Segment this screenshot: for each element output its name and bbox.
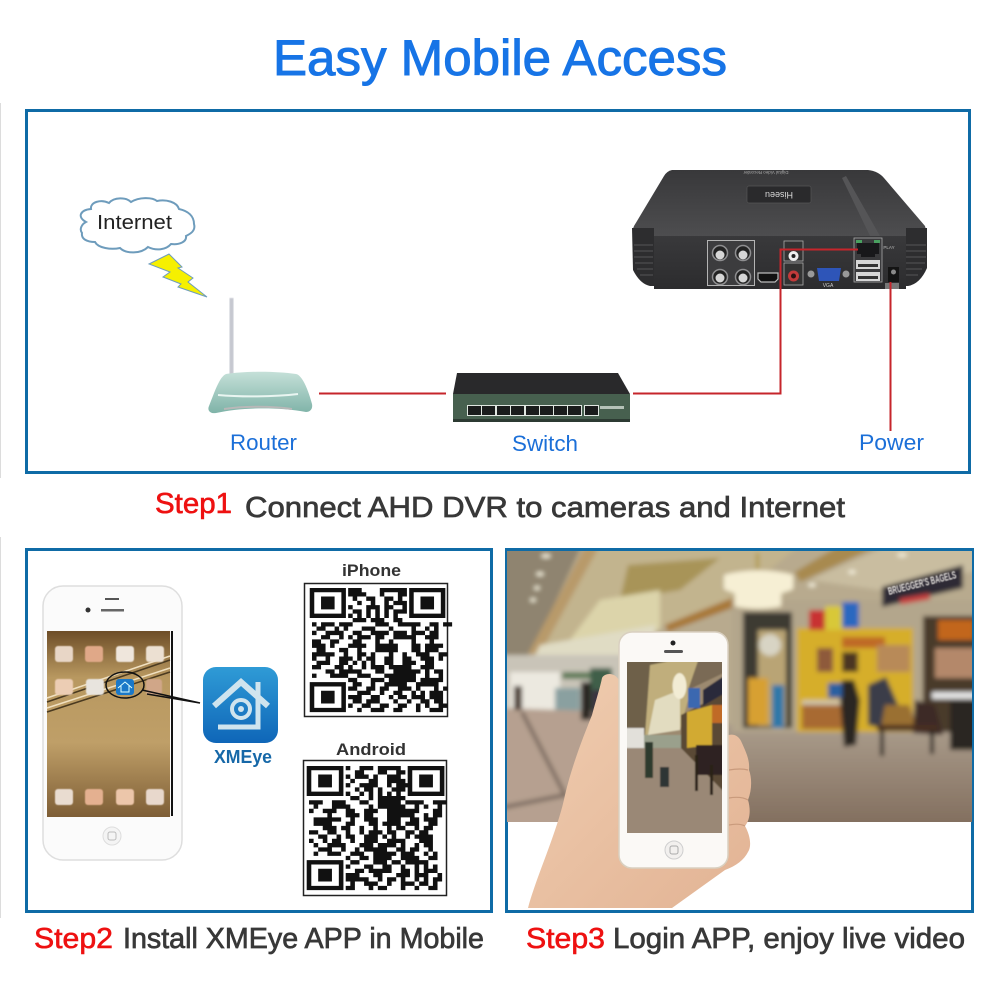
floor <box>728 725 972 822</box>
people <box>514 677 980 756</box>
mall photo background <box>500 545 983 830</box>
hand <box>528 674 751 908</box>
DVR top surface <box>632 170 926 238</box>
distant concourse <box>507 652 618 710</box>
label: Android: Android <box>336 740 406 759</box>
shop signs <box>882 565 963 607</box>
phone body <box>619 632 728 868</box>
phone screen <box>47 631 170 817</box>
power socket <box>883 245 899 289</box>
icon: internet cloud <box>81 198 194 252</box>
panel border <box>506 550 972 912</box>
DVR model text: Digital Video Recorder <box>743 170 788 175</box>
DVR logo plate: Hiseeu <box>765 190 793 200</box>
label: iPhone: iPhone <box>342 561 401 580</box>
BNC ports <box>708 240 754 286</box>
hand holding phone <box>528 632 751 908</box>
HDMI port <box>758 273 778 282</box>
icon: DVR recorder <box>632 170 927 289</box>
VGA port: VGA <box>823 283 834 289</box>
pendant lamp <box>756 553 759 571</box>
left edge marks <box>0 103 2 918</box>
label: router: Router <box>230 430 297 455</box>
DVR side ribs <box>632 228 927 286</box>
lights <box>530 553 907 602</box>
XMEye small icon <box>116 679 134 695</box>
step 2 caption: Step2 <box>34 923 113 955</box>
audio ports <box>784 241 803 285</box>
magnifier circle and pointer <box>106 672 200 703</box>
home button <box>103 827 121 845</box>
DVR rear panel <box>654 236 906 289</box>
phone with home screen <box>43 586 200 860</box>
label: XMEye: XMEye <box>214 747 272 767</box>
panel: step 2 install app <box>26 550 492 912</box>
step 1 caption: Connect AHD DVR to cameras and Internet <box>245 492 845 524</box>
storefront wall <box>734 726 794 731</box>
panel border <box>26 110 970 472</box>
DVR logo plate <box>747 186 811 203</box>
QR code: iPhone <box>304 584 452 716</box>
power socket: PLAY <box>883 245 895 250</box>
step 3 caption: Step3 <box>526 923 605 955</box>
panel: step 3 live video <box>500 545 983 912</box>
phone screen with mini mall view <box>627 662 722 833</box>
connection lines <box>319 288 890 431</box>
VGA port <box>808 268 850 289</box>
label: power: Power <box>859 430 924 455</box>
mall ceiling <box>507 551 581 656</box>
red link over DVR <box>780 250 890 290</box>
icon: network switch <box>453 373 630 422</box>
app icons <box>55 646 164 805</box>
icon: internet cloud: Internet <box>97 212 172 234</box>
step 2 caption: Install XMEye APP in Mobile <box>123 923 484 955</box>
network and USB ports <box>854 238 882 282</box>
icon: lightning bolt <box>149 254 207 297</box>
title: Easy Mobile Access <box>273 30 727 86</box>
icon: XMEye app <box>203 667 278 743</box>
label: switch: Switch <box>512 431 578 456</box>
step 3 caption: Login APP, enjoy live video <box>613 923 965 955</box>
step 1 caption: Step1 <box>155 488 232 520</box>
panel border <box>26 550 492 912</box>
icon: router <box>208 298 312 413</box>
QR code: Android <box>304 760 447 896</box>
panel: step 1 network diagram <box>26 110 970 472</box>
